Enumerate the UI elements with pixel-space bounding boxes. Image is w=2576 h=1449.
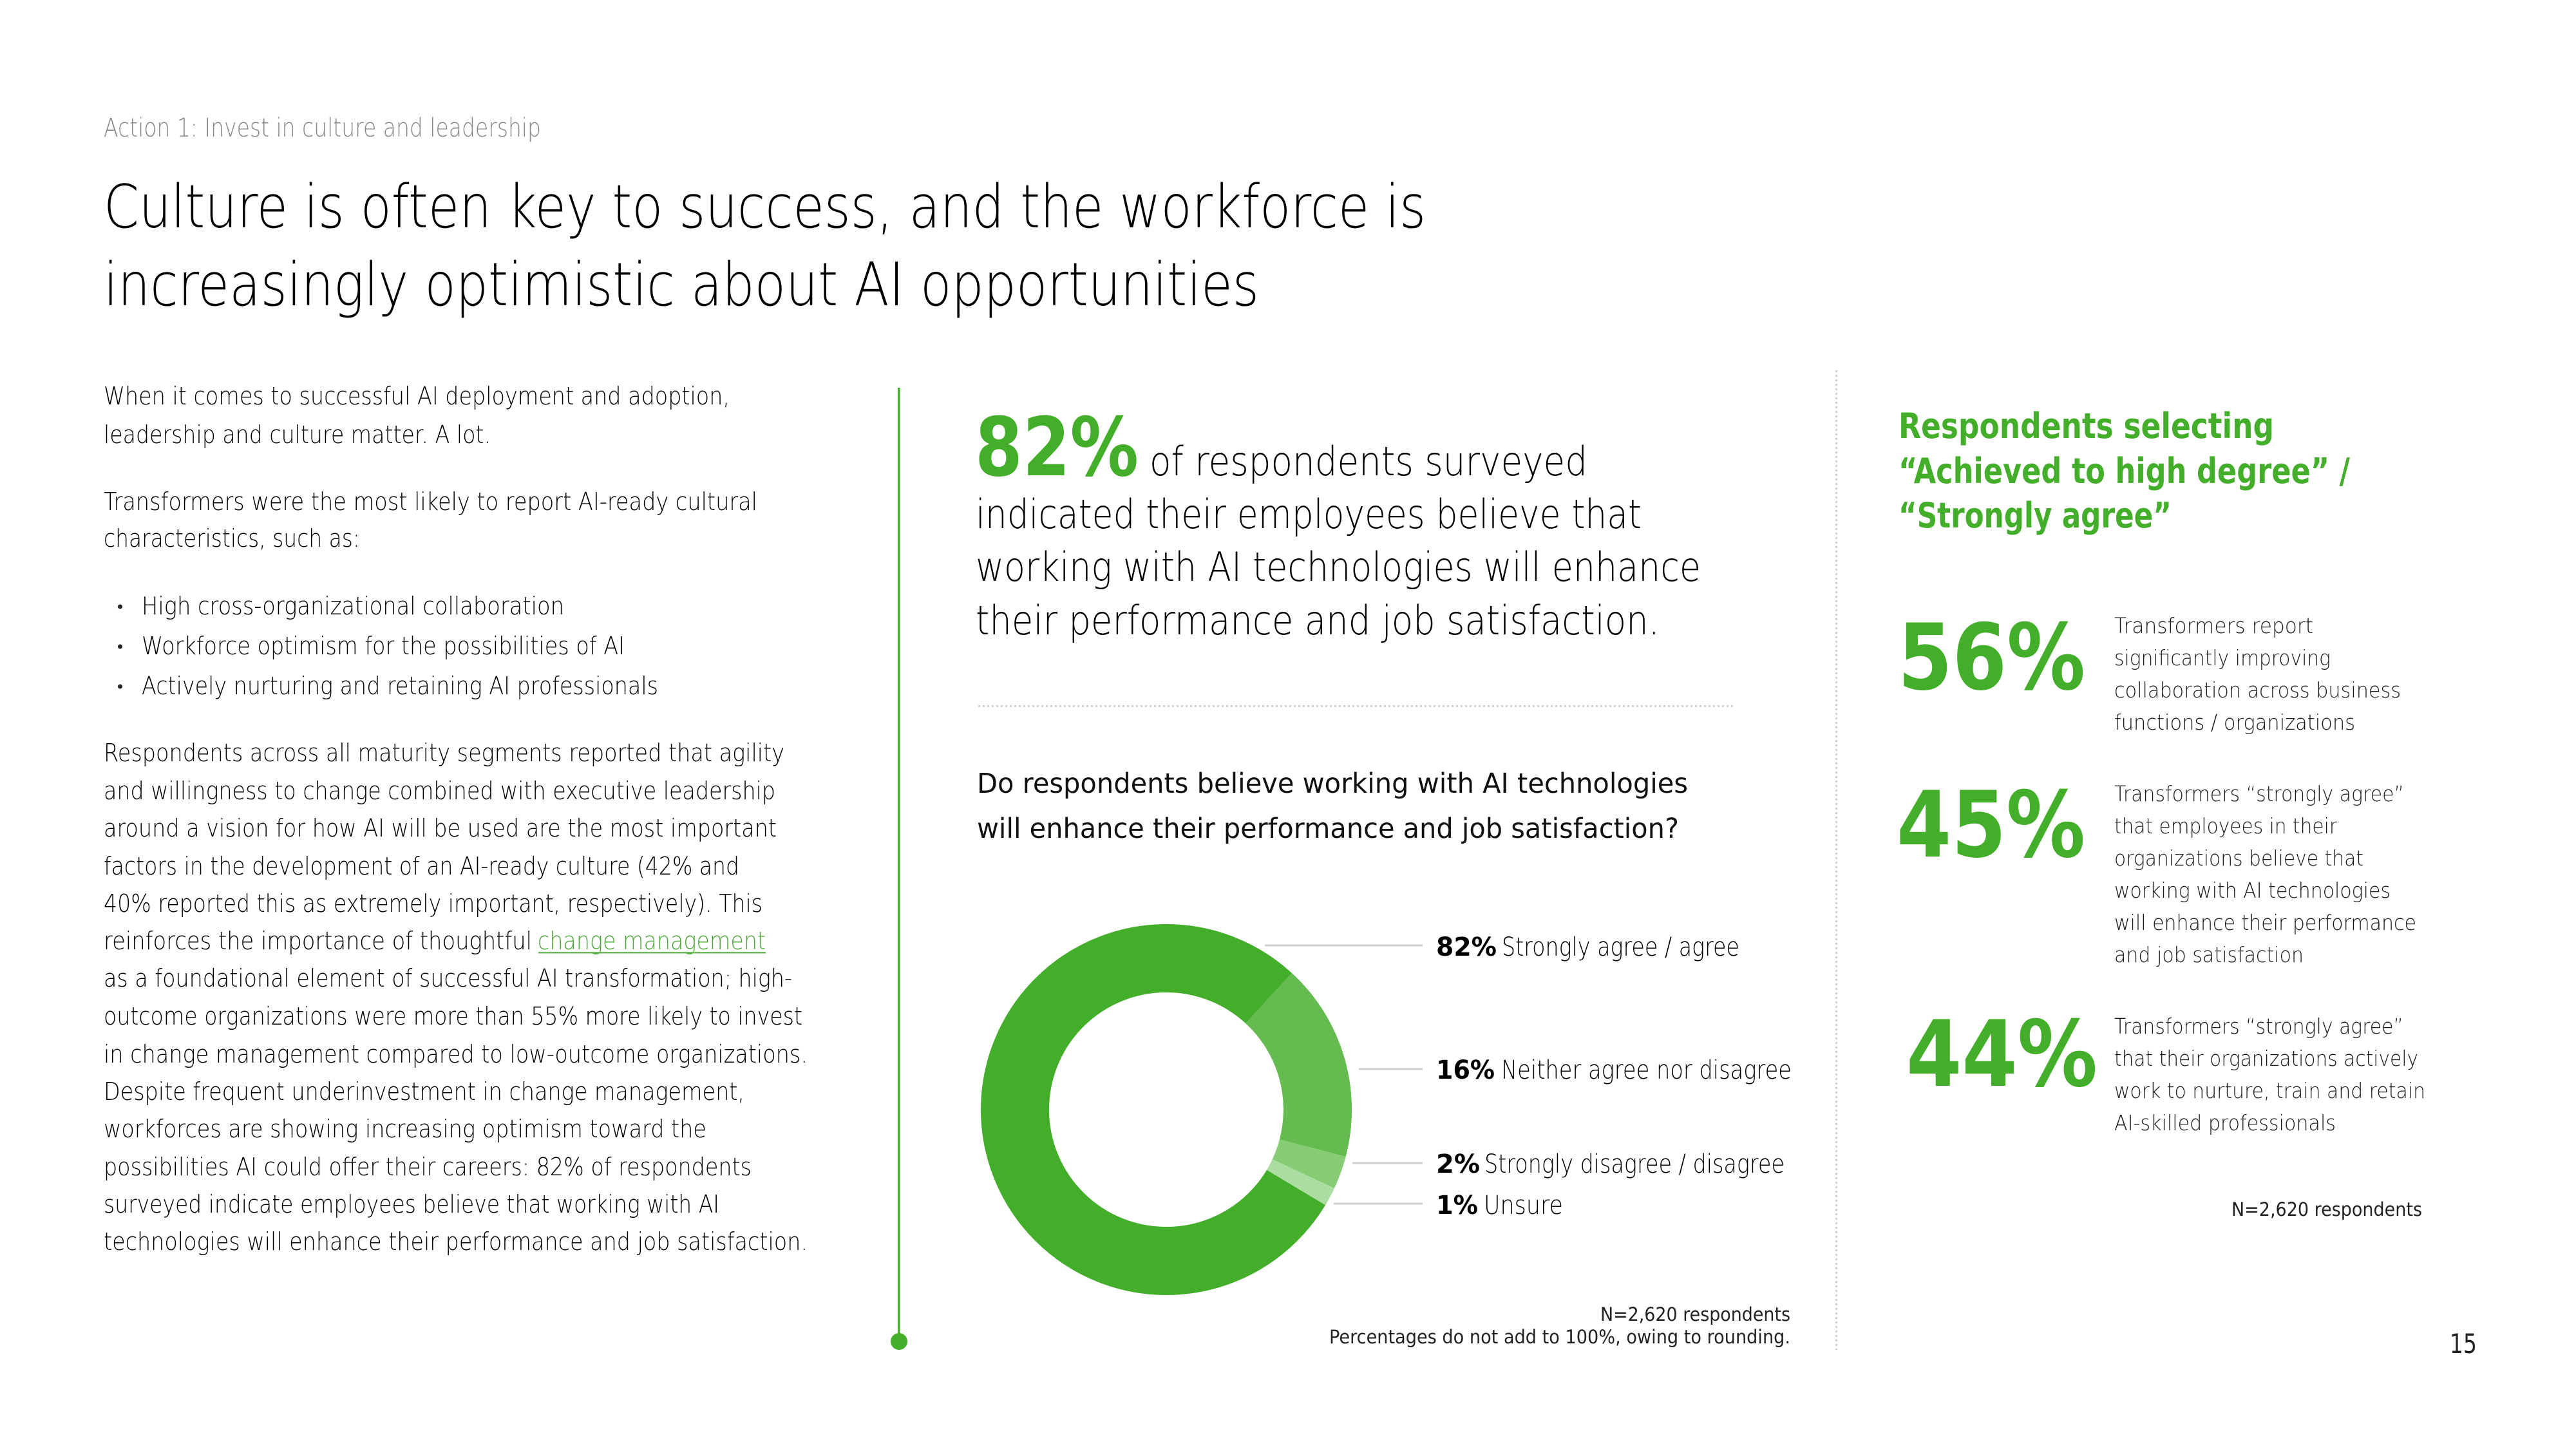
title	[104, 172, 1426, 319]
title: Culture is often key to success, and the workforce is	[104, 172, 1426, 242]
donut legend	[1436, 933, 1792, 1220]
stat: 45%: and job satisfaction	[2114, 942, 2304, 967]
segment: 2% disagree	[1273, 1139, 1346, 1188]
stat: 44%	[1906, 1001, 2425, 1135]
text block: intro	[104, 382, 757, 553]
donut legend: Neither agree nor disagree	[1501, 1056, 1792, 1085]
text block: body paragraph: possibilities AI could offer their careers: 82% of respondents	[104, 1153, 752, 1181]
text block: intro: characteristics, such as:	[104, 524, 360, 553]
lead statement: 82%: indicated their employees believe that	[976, 491, 1642, 538]
title: increasingly optimistic about AI opportunities	[104, 250, 1259, 319]
text block: body paragraph: reinforces the importance of thoughtful	[104, 927, 532, 955]
text block: body paragraph: change management	[538, 927, 766, 955]
stat: 56%: collaboration across business	[2114, 677, 2401, 703]
text block: body paragraph: Despite frequent underinvestment in change management,	[104, 1077, 744, 1106]
chart question	[977, 768, 1688, 845]
kicker: Action 1: Invest in culture and leadership	[104, 113, 541, 143]
chart footnote: N=2,620 respondents	[1600, 1303, 1790, 1325]
text block: body paragraph: technologies will enhance their performance and job satisfaction.	[104, 1227, 808, 1256]
page number: 15	[2450, 1328, 2477, 1359]
bullet list: Workforce optimism for the possibilities of AI	[142, 632, 625, 660]
panel heading: respondents selecting: Respondents selecting	[1899, 406, 2274, 446]
stat: 44%: 44%	[1906, 1001, 2098, 1108]
donut legend: 2%	[1436, 1150, 1480, 1179]
stat: 45%: working with AI technologies	[2114, 878, 2391, 903]
panel heading: respondents selecting: “Strongly agree”	[1899, 495, 2172, 536]
lead statement: 82%: of respondents surveyed	[1150, 438, 1587, 485]
segment: 16% neither	[1245, 973, 1352, 1157]
bullet list	[118, 592, 658, 700]
text block: body paragraph: Respondents across all maturity segments reported that agility	[104, 739, 784, 767]
text block: body paragraph	[104, 739, 808, 1256]
text block: body paragraph: in change management compared to low-outcome organizations.	[104, 1040, 808, 1068]
stat: 56%: significantly improving	[2114, 645, 2331, 670]
chart footnote	[1329, 1303, 1790, 1348]
stat: 45%: that employees in their	[2114, 813, 2337, 838]
chart footnote: Percentages do not add to 100%, owing to rounding.	[1329, 1326, 1790, 1348]
timeline rule with end dot	[891, 388, 907, 1350]
text block: body paragraph: factors in the development of an AI-ready culture (42% and	[104, 852, 739, 880]
lead statement: 82%: working with AI technologies will enhance	[976, 544, 1701, 591]
stat: 56%	[1898, 605, 2401, 735]
stat: 44%: that their organizations actively	[2114, 1046, 2418, 1071]
text block: body paragraph: and willingness to change combined with executive leadership	[104, 777, 775, 805]
donut legend: 82%	[1436, 933, 1497, 962]
bullet list: Actively nurturing and retaining AI professionals	[142, 672, 658, 700]
stat: 44%: work to nurture, train and retain	[2114, 1078, 2425, 1103]
segment: 1% unsure	[1267, 1159, 1334, 1205]
stat: 45%	[1897, 772, 2416, 967]
text block: body paragraph: as a foundational element of successful AI transformation; high-	[104, 964, 792, 992]
donut legend: 1%	[1436, 1191, 1478, 1220]
stat: 45%: 45%	[1897, 772, 2085, 878]
stat: 56%: 56%	[1898, 605, 2085, 711]
stat: 44%: Transformers “strongly agree”	[2114, 1014, 2403, 1039]
donut legend: Unsure	[1484, 1191, 1563, 1220]
lead statement: 82%: their performance and job satisfaction.	[976, 597, 1660, 644]
lead statement: 82%	[975, 400, 1701, 644]
panel heading: respondents selecting: “Achieved to high degree” /	[1899, 451, 2350, 491]
leader lines	[1265, 945, 1423, 1204]
text block: body paragraph: workforces are showing increasing optimism toward the	[104, 1115, 706, 1143]
chart question: Do respondents believe working with AI technologies	[977, 768, 1688, 800]
stat: 45%: will enhance their performance	[2114, 910, 2416, 935]
stat: 44%: AI-skilled professionals	[2114, 1110, 2336, 1135]
text block: intro: leadership and culture matter. A lot.	[104, 421, 491, 449]
donut chart	[1015, 958, 1352, 1261]
stat: 45%: Transformers “strongly agree”	[2114, 781, 2404, 806]
stat: 56%: Transformers report	[2114, 613, 2313, 638]
stat: 45%: organizations believe that	[2114, 846, 2363, 871]
chart question: will enhance their performance and job satisfaction?	[977, 813, 1679, 845]
text block: intro: When it comes to successful AI deployment and adoption,	[104, 382, 730, 410]
lead statement: 82%: 82%	[975, 400, 1139, 495]
donut legend: Strongly disagree / disagree	[1484, 1150, 1785, 1179]
text block: body paragraph: outcome organizations were more than 55% more likely to invest	[104, 1002, 802, 1030]
text block: body paragraph: around a vision for how AI will be used are the most important	[104, 814, 777, 842]
text block: body paragraph: 40% reported this as extremely important, respectively). This	[104, 889, 762, 918]
bullet list: High cross-organizational collaboration	[142, 592, 564, 620]
stat: 56%: functions / organizations	[2114, 710, 2355, 735]
panel heading: respondents selecting	[1899, 406, 2350, 536]
text block: body paragraph: surveyed indicate employees believe that working with AI	[104, 1190, 719, 1218]
donut legend: Strongly agree / agree	[1502, 933, 1739, 962]
donut legend: 16%	[1436, 1056, 1495, 1085]
right panel footnote: N=2,620 respondents	[2231, 1198, 2422, 1220]
text block: intro: Transformers were the most likely to report AI-ready cultural	[104, 488, 757, 516]
